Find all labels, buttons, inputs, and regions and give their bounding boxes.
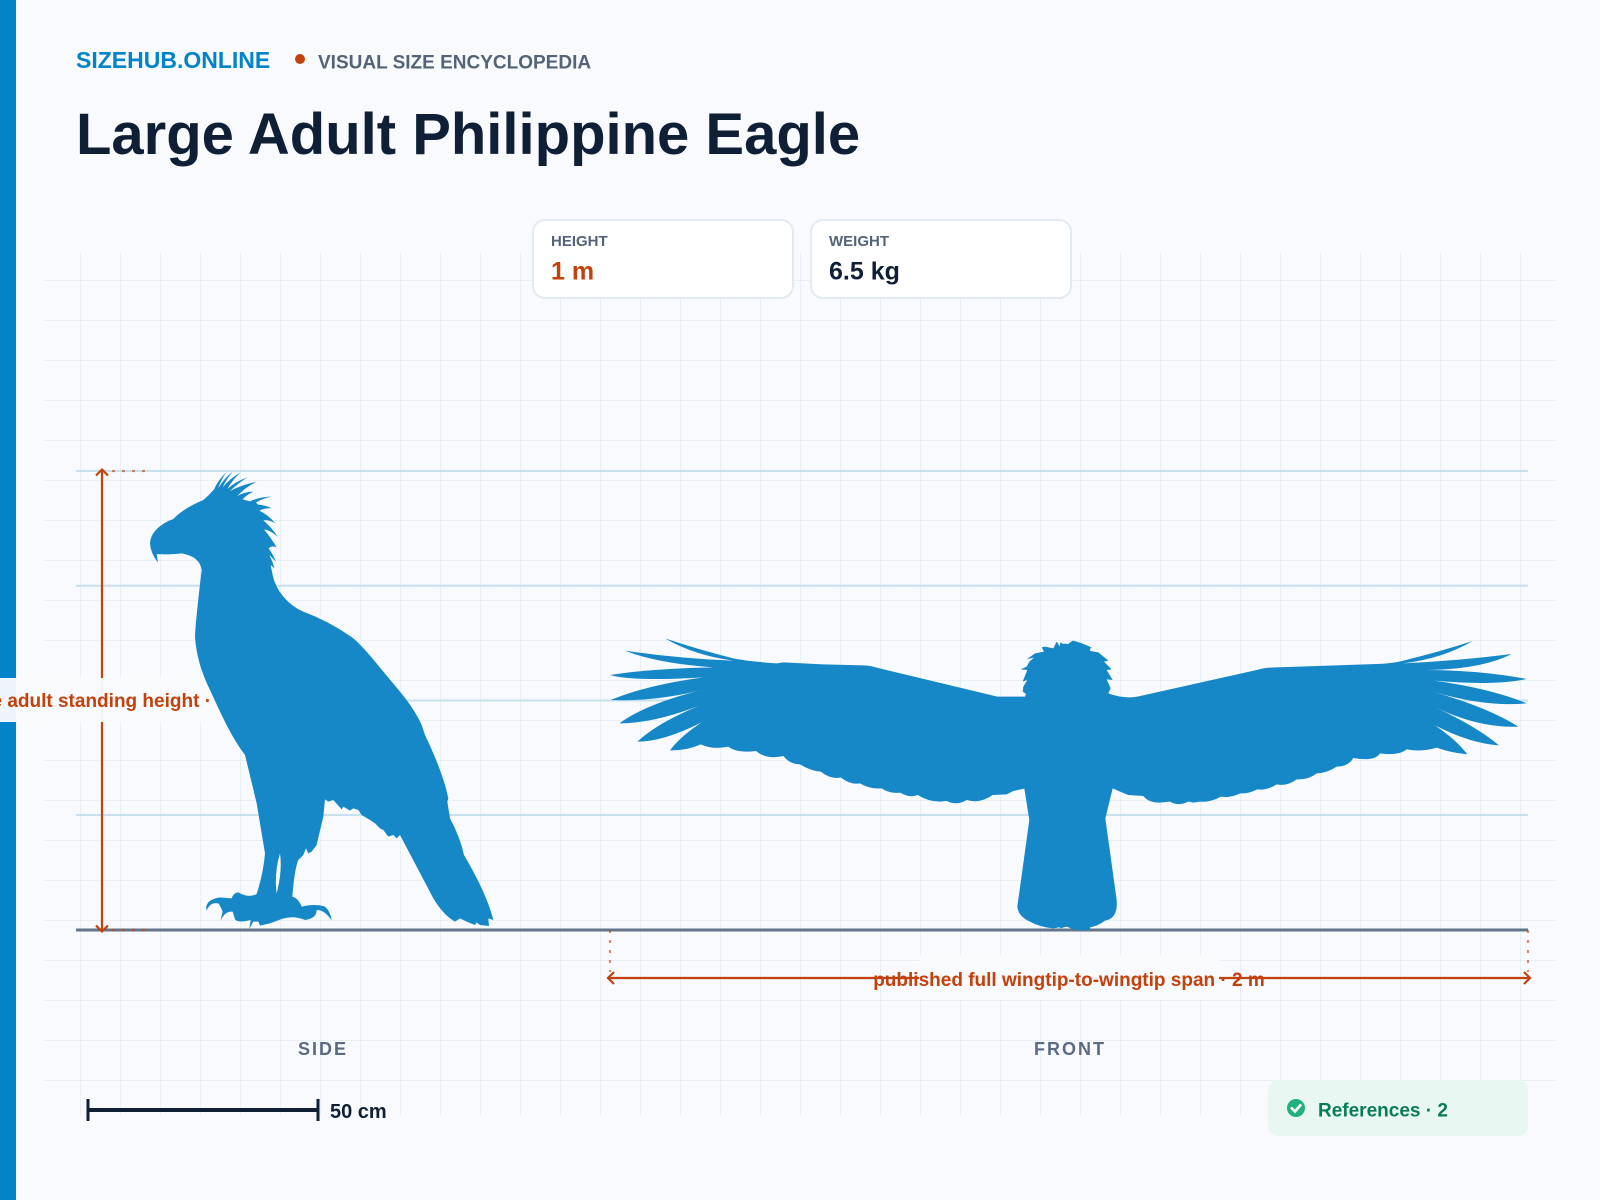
view label: front: FRONT [1034,1039,1106,1059]
right wing and body [1060,641,1527,930]
scale bar [88,1099,387,1123]
scale bar: 50 cm [330,1101,387,1123]
stat card: height: HEIGHT [551,233,608,250]
references badge: References · 2 [1318,1100,1448,1122]
height dimension label [0,678,252,722]
left accent bar [0,0,16,1200]
height dimension arrow [96,470,146,932]
view label: side: SIDE [298,1039,348,1059]
stat card: weight: WEIGHT [829,233,889,250]
ground line [76,928,1528,932]
references badge [1268,1080,1528,1136]
span dimension label [873,956,1265,1000]
icon: check mark [1287,1099,1305,1117]
height guide lines [76,471,1528,815]
brand header [76,47,591,74]
brand header: SIZEHUB.ONLINE [76,47,270,73]
brand header: VISUAL SIZE ENCYCLOPEDIA [318,52,591,74]
stat card: height: 1 m [551,258,594,286]
left wing and body [610,638,1090,930]
span dimension arrow [608,930,1530,984]
stat card: weight [811,220,1071,298]
stat card: weight: 6.5 kg [829,258,900,286]
stat card: height [533,220,793,298]
title: Large Adult Philippine Eagle [76,102,860,167]
span dimension label: published full wingtip-to-wingtip span · 2 m [873,970,1265,991]
silhouette: side view eagle [150,472,493,929]
silhouette: front view eagle [610,638,1527,930]
